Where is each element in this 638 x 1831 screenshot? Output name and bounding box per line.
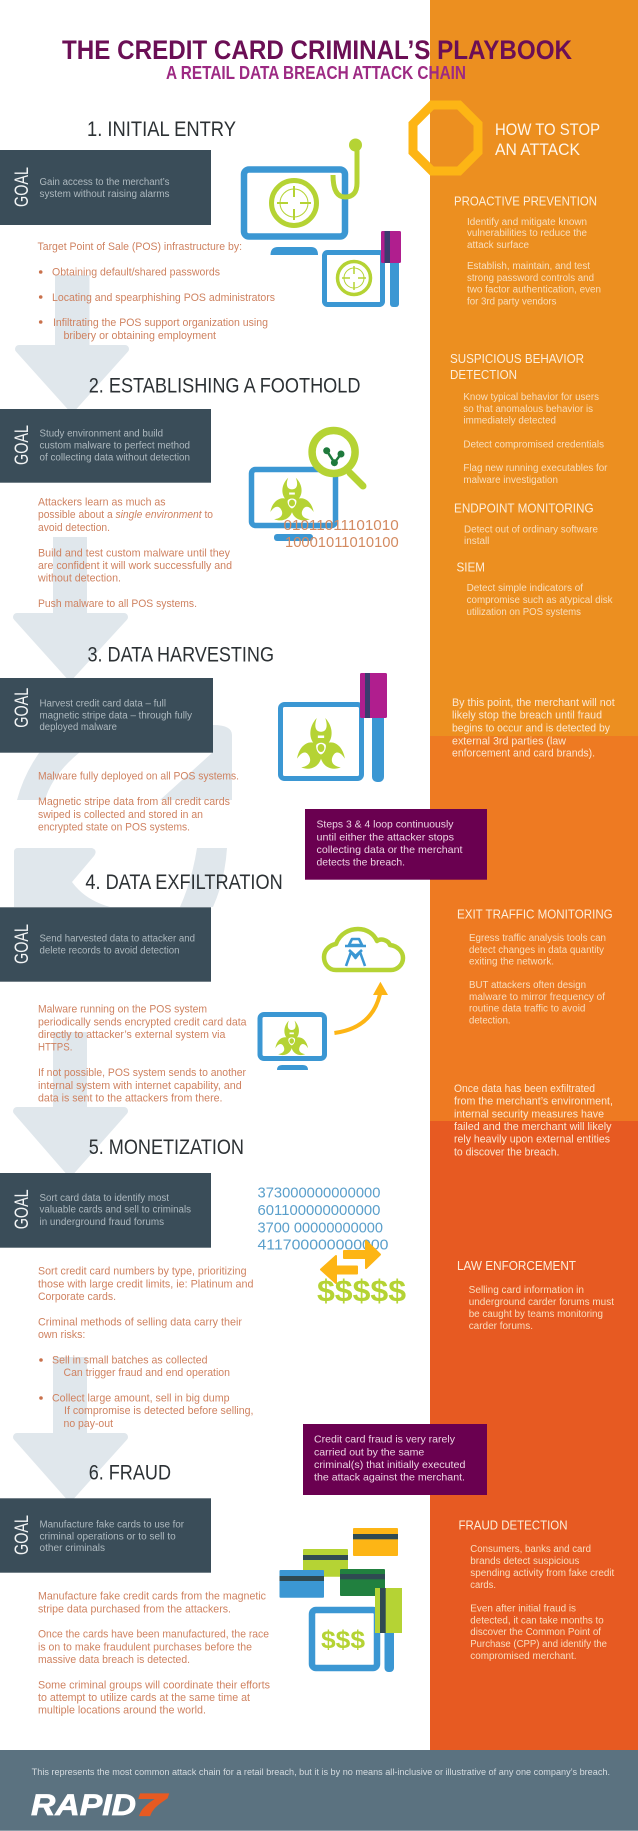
text block: step 4 details	[38, 1004, 247, 1104]
section: fraud detection: Even after initial fraud is	[470, 1604, 576, 1615]
text block: step 5 details: no pay-out	[64, 1418, 113, 1430]
text: data exfiltrated, external discovery: Once data has been exfiltrated	[454, 1083, 595, 1095]
step 6 heading: 6. FRAUD	[89, 1461, 171, 1484]
text block: step 4 details: data is sent to the attackers from there.	[38, 1092, 222, 1104]
icon: attacker in cloud	[324, 929, 403, 970]
callout: fraud carried out by others: criminal(s) that initially executed	[314, 1459, 466, 1471]
step 1 heading: 1. INITIAL ENTRY	[87, 118, 236, 141]
text block: step 4 details: internal system with internet capability, and	[38, 1080, 242, 1092]
goal label: GOAL	[12, 1515, 33, 1555]
text block: step 5 details: Corporate cards.	[38, 1291, 116, 1303]
text block: step 6 details: Once the cards have been manufactured, the race	[38, 1629, 269, 1641]
section: proactive prevention: vulnerabilities to reduce the	[467, 228, 587, 239]
dollar signs: $$$$$	[317, 1273, 406, 1308]
icon: monitor with biohazard, magnifier	[252, 430, 363, 541]
text: data exfiltrated, external discovery	[454, 1083, 613, 1158]
goal text: other criminals	[40, 1543, 105, 1554]
icon: POS terminal with target and card	[324, 231, 401, 307]
section: suspicious behavior detection: Know typical behavior for users	[463, 392, 599, 403]
section: exit traffic monitoring: routine data traffic to avoid	[469, 1004, 585, 1015]
text block: step 2 details: are confident it will work successfully and	[38, 560, 232, 572]
text block: step 6 details: Manufacture fake credit cards from the magnetic	[38, 1591, 266, 1603]
text block: step 5 details	[38, 1266, 254, 1430]
binary data: 01011011101010	[284, 517, 399, 534]
text block: step 5 details: Sort credit card numbers by type, prioritizing	[38, 1266, 246, 1278]
binary data: 10001011010100	[285, 534, 399, 551]
text: data exfiltrated, external discovery: internal security measures have	[454, 1108, 604, 1120]
text block: step 2 details: avoid detection.	[38, 522, 110, 534]
callout: steps 3 and 4 loop: collecting data or the merchant	[316, 844, 463, 856]
text block: step 3 details	[38, 771, 239, 834]
text block: step 5 details: Can trigger fraud and end operation	[64, 1367, 230, 1379]
text block: step 6 details: multiple locations around the world.	[38, 1705, 206, 1717]
goal text: custom malware to perfect method	[40, 441, 190, 452]
section: proactive prevention: for 3rd party vendors	[467, 297, 556, 308]
section: suspicious behavior detection: so that anomalous behavior is	[463, 404, 593, 415]
text block: step 1 details: Locating and spearphishing POS administrators	[52, 292, 275, 304]
step 3 heading: 3. DATA HARVESTING	[88, 644, 274, 667]
text block: step 3 details: Magnetic stripe data from all credit cards	[38, 796, 230, 808]
callout: fraud carried out by others: carried out by the same	[314, 1446, 424, 1458]
text: data exfiltrated, external discovery: rely heavily upon external entities	[454, 1134, 610, 1146]
section: fraud detection: cards.	[470, 1580, 496, 1591]
section: exit traffic monitoring: detection.	[469, 1016, 511, 1027]
text block: step 6 details: stripe data purchased from the attackers.	[38, 1603, 231, 1615]
section: suspicious behavior detection	[450, 351, 608, 486]
section: exit traffic monitoring: exiting the network.	[469, 957, 554, 968]
section: SIEM	[456, 559, 614, 618]
panel: step 1 goal	[0, 150, 211, 225]
card numbers: 411700000000000	[258, 1237, 388, 1254]
callout: steps 3 and 4 loop	[305, 809, 487, 880]
section: endpoint monitoring: install	[464, 536, 489, 547]
section: SIEM: SIEM	[456, 559, 485, 574]
section: proactive prevention	[454, 193, 601, 308]
goal text	[40, 1193, 191, 1228]
text: merchant unlikely to stop breach: begins to occur and is detected by	[452, 722, 610, 734]
goal label: GOAL	[12, 924, 33, 964]
goal text: Harvest credit card data – full	[40, 699, 166, 710]
section: exit traffic monitoring: malware to mirror frequency of	[469, 992, 605, 1003]
goal text: deployed malware	[40, 722, 117, 733]
panel: step 6 goal	[0, 1498, 211, 1573]
text block: step 2 details: Build and test custom malware until they	[38, 548, 230, 560]
goal text	[40, 429, 190, 464]
icon: POS terminal with biohazard and card	[280, 673, 387, 782]
section: exit traffic monitoring: detect changes in data quantity	[469, 945, 604, 956]
section: suspicious behavior detection: SUSPICIOUS BEHAVIOR	[450, 351, 584, 366]
text block: step 5 details: Collect large amount, sell in big dump	[52, 1392, 230, 1404]
heading: how to stop an attack	[495, 120, 600, 159]
section: fraud detection: brands detect suspicious	[470, 1556, 579, 1567]
text: data exfiltrated, external discovery: failed and the merchant will likely	[454, 1121, 612, 1133]
text block: step 2 details: without detection.	[37, 573, 121, 585]
text block: step 2 details: Push malware to all POS systems.	[38, 598, 197, 610]
text block: step 1 details: Infiltrating the POS support organization using	[53, 317, 268, 329]
text: merchant unlikely to stop breach: By this point, the merchant will not	[452, 697, 615, 709]
panel: step 2 goal	[0, 409, 211, 483]
goal text: delete records to avoid detection	[40, 945, 180, 956]
heading: how to stop an attack: HOW TO STOP	[495, 120, 600, 139]
section: fraud detection: Purchase (CPP) and identify the	[470, 1639, 607, 1650]
section: proactive prevention: Identify and mitigate known	[467, 217, 587, 228]
callout: fraud carried out by others: the attack against the merchant.	[314, 1472, 465, 1484]
goal label: GOAL	[12, 1189, 33, 1229]
text block: step 4 details: Malware running on the POS system	[38, 1004, 207, 1016]
goal text: valuable cards and sell to criminals	[40, 1205, 191, 1216]
step 5 heading: 5. MONETIZATION	[89, 1136, 244, 1159]
section: SIEM: compromise such as atypical disk	[467, 595, 614, 606]
step 4 heading: 4. DATA EXFILTRATION	[85, 871, 283, 894]
arrow: step 2 to step 3	[17, 537, 124, 676]
text block: step 2 details: possible about a single environment to	[38, 509, 213, 521]
section: law enforcement: Selling card information in	[469, 1285, 584, 1296]
text block: step 5 details: Sell in small batches as collected	[52, 1354, 208, 1366]
goal text: criminal operations or to sell to	[40, 1531, 176, 1542]
goal text: in underground fraud forums	[40, 1217, 164, 1228]
section: exit traffic monitoring: BUT attackers often design	[469, 980, 586, 991]
logo: Rapid7	[31, 1789, 167, 1822]
section: fraud detection: compromised merchant.	[470, 1651, 576, 1662]
section: law enforcement: underground carder forums must	[469, 1297, 614, 1308]
section: proactive prevention: Establish, maintain, and test	[467, 261, 590, 272]
section: proactive prevention: PROACTIVE PREVENTION	[454, 193, 597, 208]
text block: step 6 details: to attempt to utilize cards at the same time at	[38, 1692, 250, 1704]
text: merchant unlikely to stop breach	[452, 697, 615, 760]
text block: step 6 details: Some criminal groups will coordinate their efforts	[38, 1679, 270, 1691]
panel: step 5 goal	[0, 1173, 211, 1248]
section: proactive prevention: attack surface	[467, 240, 529, 251]
goal label: GOAL	[12, 688, 33, 728]
goal text: system without raising alarms	[40, 189, 170, 200]
section: fraud detection: Consumers, banks and card	[470, 1544, 591, 1555]
text block: step 3 details: Malware fully deployed on all POS systems.	[38, 771, 239, 783]
loop arrow: upper arc between steps 3 and 4	[17, 725, 232, 800]
right column: how to stop an attack background	[430, 0, 638, 1750]
card numbers: 3700 00000000000	[258, 1219, 383, 1236]
section: fraud detection	[458, 1517, 615, 1662]
text block: step 5 details: Criminal methods of selling data carry their	[38, 1316, 242, 1328]
card numbers	[258, 1185, 388, 1254]
section: law enforcement	[457, 1258, 614, 1332]
text: merchant unlikely to stop breach: enforcement and card brands).	[452, 748, 595, 760]
arrow: step 4 to step 5	[17, 1032, 124, 1172]
goal label: GOAL	[12, 425, 33, 465]
callout: steps 3 and 4 loop: Steps 3 & 4 loop continuously	[316, 819, 454, 831]
section: fraud detection: spending activity from fake credit	[470, 1568, 615, 1579]
text block: step 2 details	[37, 497, 232, 610]
goal text: of collecting data without detection	[40, 453, 190, 464]
section: suspicious behavior detection: immediately detected	[463, 416, 556, 427]
goal text: Sort card data to identify most	[40, 1193, 169, 1204]
logo: Rapid7: 7	[137, 1789, 167, 1822]
callout: steps 3 and 4 loop: detects the breach.	[316, 857, 405, 869]
section: exit traffic monitoring: EXIT TRAFFIC MONITORING	[457, 906, 613, 921]
section: fraud detection: detected, it can take months to	[470, 1615, 604, 1626]
text: data exfiltrated, external discovery: to discover the breach.	[454, 1146, 559, 1158]
section: endpoint monitoring	[454, 500, 598, 547]
icon: monitor with biohazard	[260, 1014, 324, 1070]
text block: step 1 details: Target Point of Sale (POS) infrastructure by:	[38, 241, 242, 253]
goal text: magnetic stripe data – through fully	[40, 711, 192, 722]
section: suspicious behavior detection: DETECTION	[450, 367, 517, 382]
arrow: monitor to cloud	[334, 982, 388, 1033]
panel: step 3 goal	[0, 678, 213, 753]
text block: step 4 details: If not possible, POS system sends to another	[38, 1067, 246, 1079]
text block: step 5 details: If compromise is detected before selling,	[64, 1405, 254, 1417]
icon: exchange arrows	[321, 1241, 380, 1283]
text block: step 1 details: bribery or obtaining employment	[64, 330, 216, 342]
text block: step 4 details: periodically sends encrypted credit card data	[38, 1016, 247, 1028]
text block: step 2 details: Attackers learn as much as	[38, 497, 166, 509]
title: THE CREDIT CARD CRIMINAL’S PLAYBOOK	[62, 35, 572, 65]
goal text	[40, 934, 195, 956]
icon: fake credit cards and POS terminal: $$$	[321, 1626, 365, 1654]
callout: fraud carried out by others	[303, 1424, 487, 1495]
section: suspicious behavior detection: malware investigation	[463, 475, 558, 486]
arrow: step 5 to step 6	[17, 1357, 124, 1497]
card numbers: 601100000000000	[258, 1202, 380, 1219]
goal text: Send harvested data to attacker and	[40, 934, 195, 945]
section: law enforcement: carder forums.	[469, 1321, 533, 1332]
text: data exfiltrated, external discovery: from the merchant’s environment,	[454, 1096, 613, 1108]
text block: step 4 details: HTTPS.	[38, 1042, 72, 1054]
goal text: Manufacture fake cards to use for	[40, 1520, 185, 1531]
icon: stop sign octagon	[413, 105, 478, 171]
text block: step 1 details: Obtaining default/shared passwords	[52, 267, 220, 279]
section: exit traffic monitoring	[457, 906, 613, 1027]
section: fraud detection: FRAUD DETECTION	[458, 1517, 568, 1532]
section: proactive prevention: two factor authentication, even	[467, 285, 601, 296]
footer disclaimer: This represents the most common attack chain for a retail breach, but it is by no means all-inclusive or illustrative of any one company’s breach.	[32, 1767, 610, 1777]
goal label: GOAL	[12, 167, 33, 207]
section: SIEM: Detect simple indicators of	[467, 583, 583, 594]
arrow: step 1 to step 2	[19, 275, 125, 408]
panel: step 4 goal	[0, 907, 211, 982]
binary data	[284, 517, 399, 551]
heading: how to stop an attack: AN ATTACK	[495, 140, 581, 159]
text block: step 4 details: directly to attacker’s external system via	[38, 1029, 226, 1041]
callout: fraud carried out by others: Credit card fraud is very rarely	[314, 1434, 456, 1446]
icon: fake credit cards and POS terminal	[280, 1528, 402, 1672]
footer	[0, 1750, 638, 1831]
section: fraud detection: discover the Common Point of	[470, 1627, 601, 1638]
goal text	[40, 1520, 185, 1554]
text block: step 6 details: is on to make fraudulent purchases before the	[38, 1641, 252, 1653]
goal text	[40, 177, 170, 200]
text block: step 6 details	[38, 1591, 270, 1717]
text block: step 6 details: massive data breach is detected.	[38, 1654, 190, 1666]
goal text	[40, 699, 192, 733]
section: suspicious behavior detection: Flag new running executables for	[463, 463, 608, 474]
subtitle: A RETAIL DATA BREACH ATTACK CHAIN	[166, 63, 466, 83]
callout: steps 3 and 4 loop: until either the attacker stops	[316, 831, 454, 843]
section: law enforcement: LAW ENFORCEMENT	[457, 1258, 576, 1273]
text block: step 5 details: own risks:	[38, 1329, 85, 1341]
section: endpoint monitoring: Detect out of ordinary software	[464, 524, 598, 535]
logo: Rapid7: RAPID	[31, 1789, 136, 1822]
text block: step 3 details: swiped is collected and stored in an	[38, 809, 203, 821]
card numbers: 373000000000000	[258, 1185, 380, 1202]
section: exit traffic monitoring: Egress traffic analysis tools can	[469, 933, 606, 944]
text block: step 5 details: those with large credit limits, ie: Platinum and	[38, 1278, 254, 1290]
loop arrow: lower arc between steps 3 and 4	[14, 848, 227, 907]
section: suspicious behavior detection: Detect compromised credentials	[463, 439, 604, 450]
goal text: Study environment and build	[40, 429, 163, 440]
section: SIEM: utilization on POS systems	[467, 607, 581, 618]
step 2 heading: 2. ESTABLISHING A FOOTHOLD	[89, 375, 360, 398]
section: endpoint monitoring: ENDPOINT MONITORING	[454, 500, 594, 515]
text: merchant unlikely to stop breach: external 3rd parties (law	[452, 735, 566, 747]
section: proactive prevention: strong password controls and	[467, 273, 594, 284]
icon: monitor with target and phishing hook	[244, 138, 362, 255]
text: merchant unlikely to stop breach: likely stop the breach until fraud	[452, 710, 602, 722]
text block: step 3 details: encrypted state on POS systems.	[38, 822, 190, 834]
text block: step 1 details	[38, 241, 275, 342]
goal text: Gain access to the merchant’s	[40, 177, 170, 188]
section: law enforcement: be caught by teams monitoring	[469, 1309, 603, 1320]
